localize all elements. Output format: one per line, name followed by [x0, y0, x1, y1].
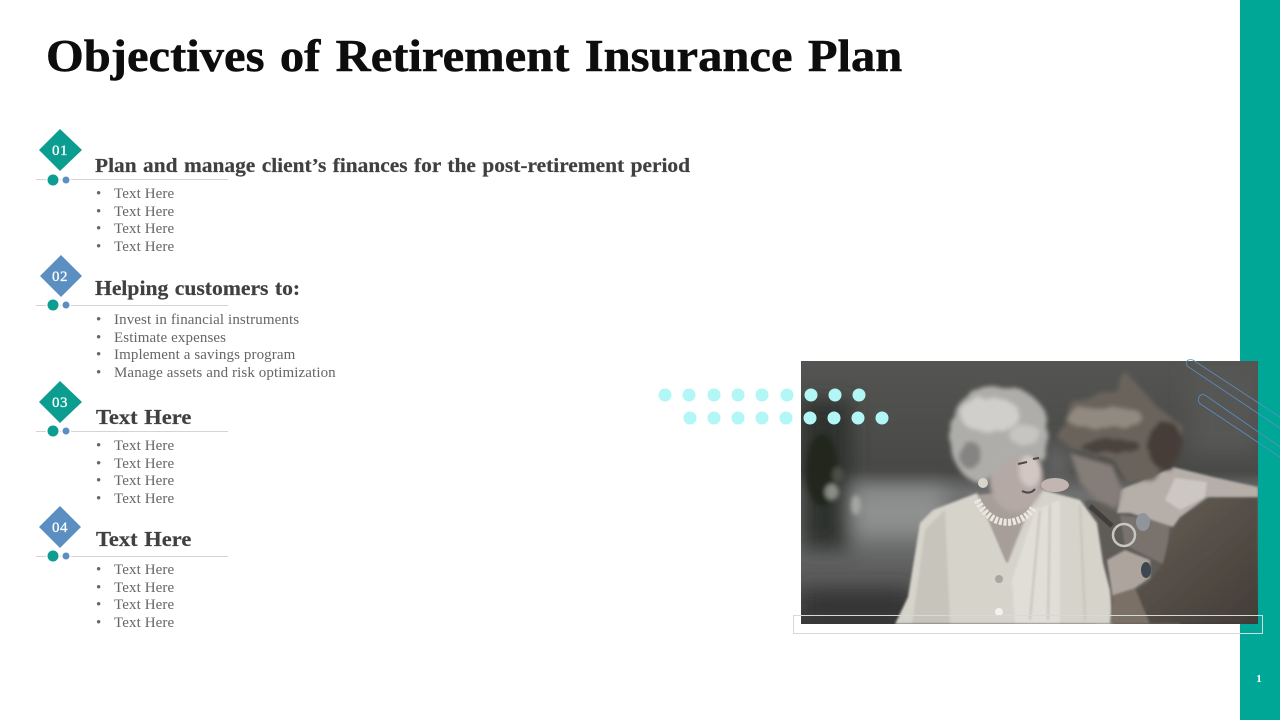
dots pattern [658, 388, 888, 424]
number 04: 04 [52, 520, 68, 536]
bullet list 02 [96, 312, 336, 381]
number 02: 02 [52, 269, 68, 285]
icon: diamond 03 [36, 381, 228, 436]
number 03: 03 [52, 395, 68, 411]
bullet list 04: Text Here [114, 562, 174, 578]
pearl necklace [977, 500, 1033, 522]
chest and dark gap [1085, 500, 1180, 624]
bullet list 04: Text Here [114, 580, 174, 596]
number 01: 01 [52, 143, 68, 159]
face details [1018, 458, 1039, 493]
icon: diamond 04 [36, 506, 228, 562]
ring and flower [1141, 562, 1151, 578]
bullet list 04: Text Here [114, 597, 174, 613]
panel: objective 01 [36, 129, 690, 255]
older woman face [989, 444, 1043, 512]
bullet list 04: Text Here [114, 615, 174, 631]
right teal sidebar [1240, 0, 1280, 720]
panel: objective 04 [36, 506, 228, 631]
decorative diagonal lines [1186, 359, 1280, 458]
bullet list 02: Manage assets and risk optimization [114, 365, 336, 381]
bullet list 03: Text Here [114, 491, 174, 507]
younger woman face [1070, 453, 1122, 510]
heading 04: Text Here [96, 527, 191, 551]
younger woman dress [1113, 497, 1258, 624]
bullet list 01: Text Here [114, 239, 174, 255]
earring [978, 478, 988, 488]
heading 03: Text Here [96, 405, 191, 429]
title: Objectives of Retirement Insurance Plan [46, 30, 902, 81]
heading 01: Plan and manage client’s finances for the post-retirement period [95, 155, 690, 177]
older woman neck [977, 488, 1045, 563]
buttons [995, 608, 1003, 616]
hand on shoulder [1041, 478, 1069, 492]
bullet list 03 [96, 438, 174, 507]
bullet list 04 [96, 562, 174, 631]
page number: 1 [1256, 673, 1262, 685]
decorative white frame [793, 615, 1263, 634]
bullet list 02: Implement a savings program [114, 347, 295, 363]
younger woman neck and shoulder [1117, 467, 1258, 527]
bullet list 01: Text Here [114, 221, 174, 237]
icon: diamond 01 [36, 129, 228, 186]
photo: elderly woman and younger woman [801, 361, 1258, 624]
heading 02: Helping customers to: [95, 276, 300, 300]
icon: diamond 02 [36, 255, 228, 310]
bullet list 03: Text Here [114, 456, 174, 472]
older woman hair [949, 387, 1048, 483]
panel: objective 02 [36, 255, 336, 381]
bullet list 02: Invest in financial instruments [114, 312, 299, 328]
bullet list 01 [96, 186, 174, 255]
older woman cardigan [895, 490, 1113, 624]
bullet list 03: Text Here [114, 473, 174, 489]
bullet list 03: Text Here [114, 438, 174, 454]
bullet list 01: Text Here [114, 204, 174, 220]
younger woman hair [1057, 373, 1183, 483]
background [801, 361, 1258, 624]
clasped hands and arm [1107, 550, 1150, 624]
glasses [1113, 524, 1135, 546]
plant on left [806, 434, 861, 515]
panel: objective 03 [36, 381, 228, 507]
bullet list 01: Text Here [114, 186, 174, 202]
bullet list 02: Estimate expenses [114, 330, 226, 346]
